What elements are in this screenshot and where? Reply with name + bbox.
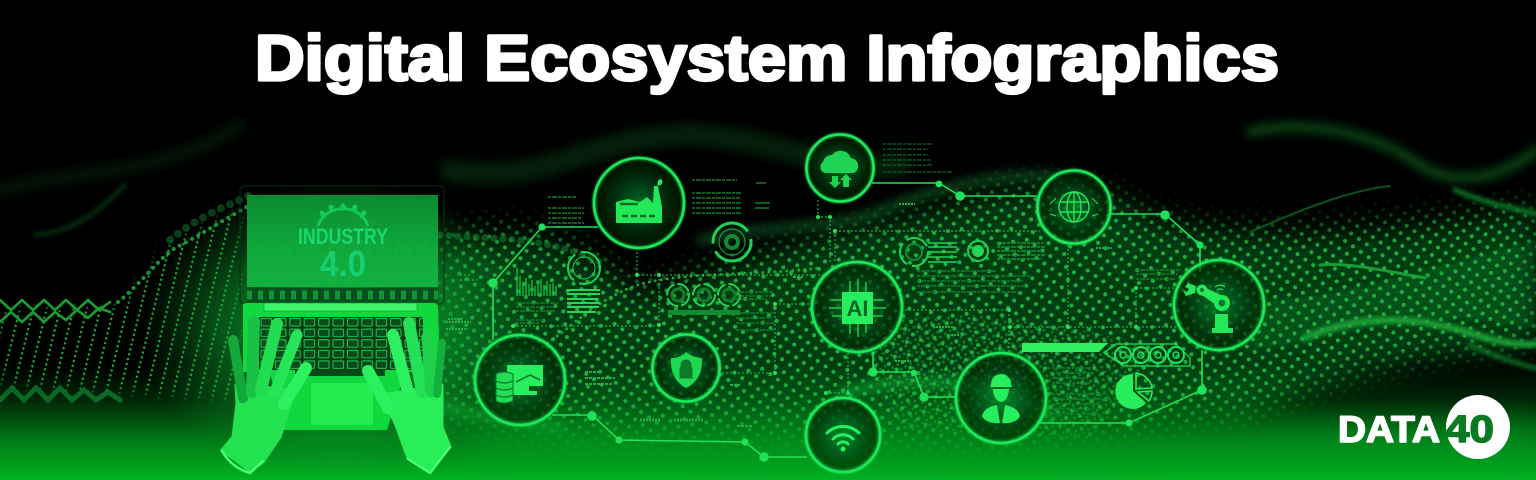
node: wifi	[806, 398, 880, 472]
icon: AI chip traces	[829, 279, 886, 337]
icon: database	[496, 372, 513, 403]
right hand	[368, 323, 450, 473]
icon: globe	[1050, 192, 1098, 222]
node: security shield	[652, 334, 720, 402]
icon: wifi	[827, 427, 859, 452]
node: globe	[1038, 170, 1110, 244]
laptop screen	[240, 186, 444, 304]
icon: cloud with arrows	[820, 151, 858, 188]
icon: engineer	[982, 374, 1020, 423]
node: data analytics	[475, 335, 565, 425]
background: flowing wave bands	[0, 125, 1536, 428]
connector nodes	[488, 181, 1207, 462]
laptop glow halo	[140, 182, 540, 478]
node: AI chip	[812, 262, 902, 352]
laptop screen: 4.0	[320, 243, 366, 284]
HUD: bar chart and readouts, left	[446, 180, 803, 426]
background: wave of green light	[0, 162, 1536, 455]
icon: shield	[671, 352, 702, 388]
laptop screen: INDUSTRY	[298, 224, 388, 249]
node: engineer	[956, 353, 1046, 443]
icon: padlock	[680, 360, 692, 378]
connector lines	[493, 183, 1202, 457]
node: robot arm	[1174, 260, 1264, 350]
HUD: gauges and readouts, right	[883, 144, 1181, 414]
background: bright green bottom gradient	[0, 365, 1536, 480]
logo: DATA 40	[1338, 395, 1510, 459]
dashed data links	[460, 200, 1177, 393]
HUD: gauges, left and centre	[568, 223, 751, 315]
icon: monitor with chart	[507, 365, 543, 395]
node: factory	[594, 158, 684, 248]
left hand	[222, 322, 306, 473]
HUD: progress bar with dials	[1022, 343, 1190, 366]
icon: AI chip	[842, 292, 873, 324]
icon: pie chart	[1115, 373, 1152, 409]
icon: robot arm	[1183, 283, 1233, 333]
text: AI: AI	[846, 296, 868, 321]
title: Digital Ecosystem Infographics	[255, 22, 1279, 94]
illustration: laptop with typing hands	[222, 186, 450, 473]
logo: DATA 40: 40	[1445, 409, 1494, 451]
node: cloud	[806, 134, 874, 202]
laptop deck	[243, 303, 440, 430]
icon: factory	[616, 179, 662, 223]
logo: DATA 40: DATA	[1338, 409, 1440, 450]
